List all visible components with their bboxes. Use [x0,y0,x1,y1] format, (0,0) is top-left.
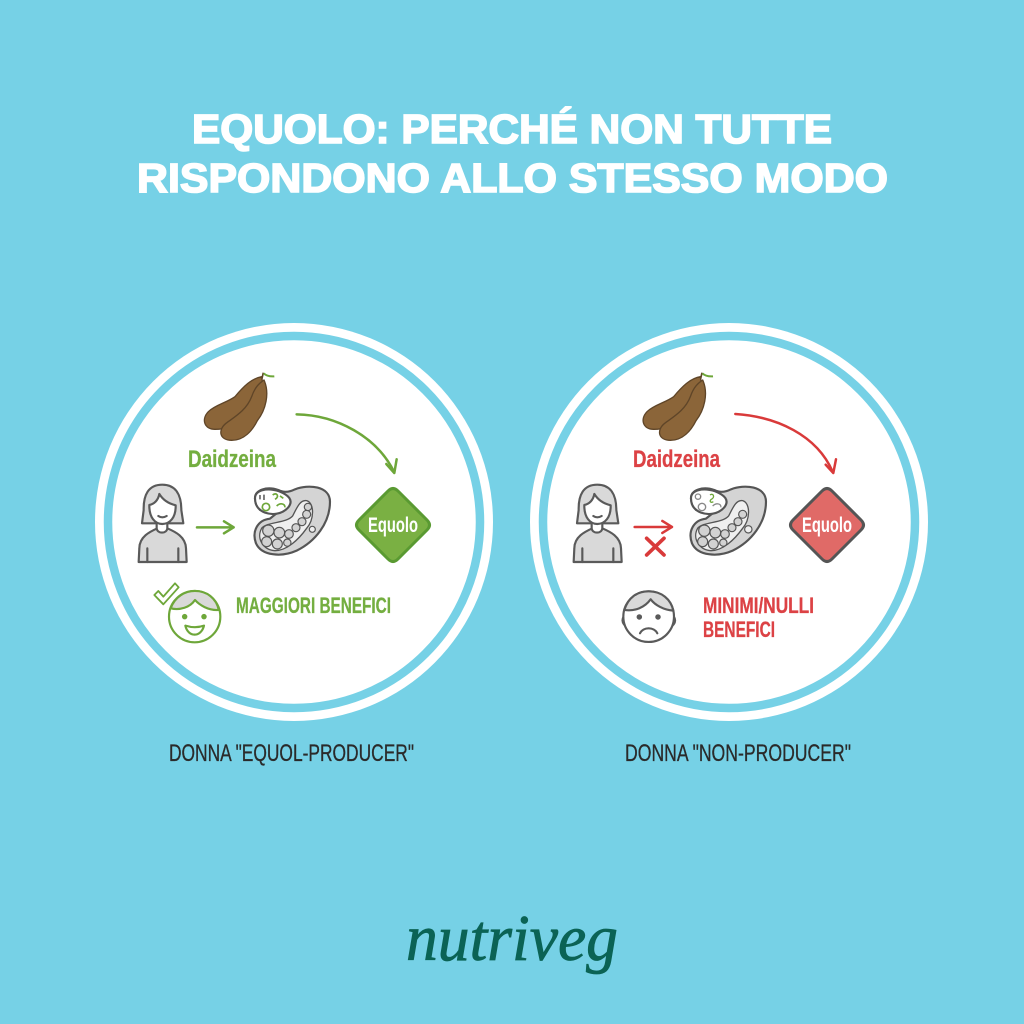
icon: soy pod [204,373,274,440]
caption: non-producer: DONNA "NON-PRODUCER" [625,740,851,767]
icon: gut [691,487,766,555]
icon: woman [574,485,622,562]
label: Daidzeina: Daidzeina [633,446,721,473]
label: benefits [703,593,814,642]
arrow to Equolo [297,414,397,473]
arrow blocked with cross [635,521,672,555]
title: RISPONDONO ALLO STESSO MODO [137,155,888,201]
icon: Equolo diamond [356,488,430,562]
title: EQUOLO: PERCHÉ NON TUTTE [192,106,832,152]
label: Daidzeina: Daidzeina [188,446,277,473]
icon: sad face [623,591,675,642]
arrow to Equolo [735,414,836,473]
label: benefits: MAGGIORI BENEFICI [236,593,391,618]
icon: Equolo diamond: Equolo [802,514,852,537]
logo: nutriveg: nutriveg [406,902,618,975]
title [137,106,888,201]
circle frame [530,323,928,721]
icon: happy face [154,583,220,642]
icon: soy pod [643,373,713,440]
label: benefits: BENEFICI [703,617,775,642]
label: benefits: MINIMI/NULLI [703,593,814,618]
icon: woman [139,485,187,562]
icon: gut [255,487,330,555]
circle frame [95,323,493,721]
icon: Equolo diamond: Equolo [368,514,418,537]
panel: non-producer [530,323,928,721]
arrow to gut [197,521,234,533]
panel: equol-producer [95,323,493,721]
caption: equol-producer: DONNA "EQUOL-PRODUCER" [169,740,414,767]
icon: Equolo diamond [790,488,864,562]
